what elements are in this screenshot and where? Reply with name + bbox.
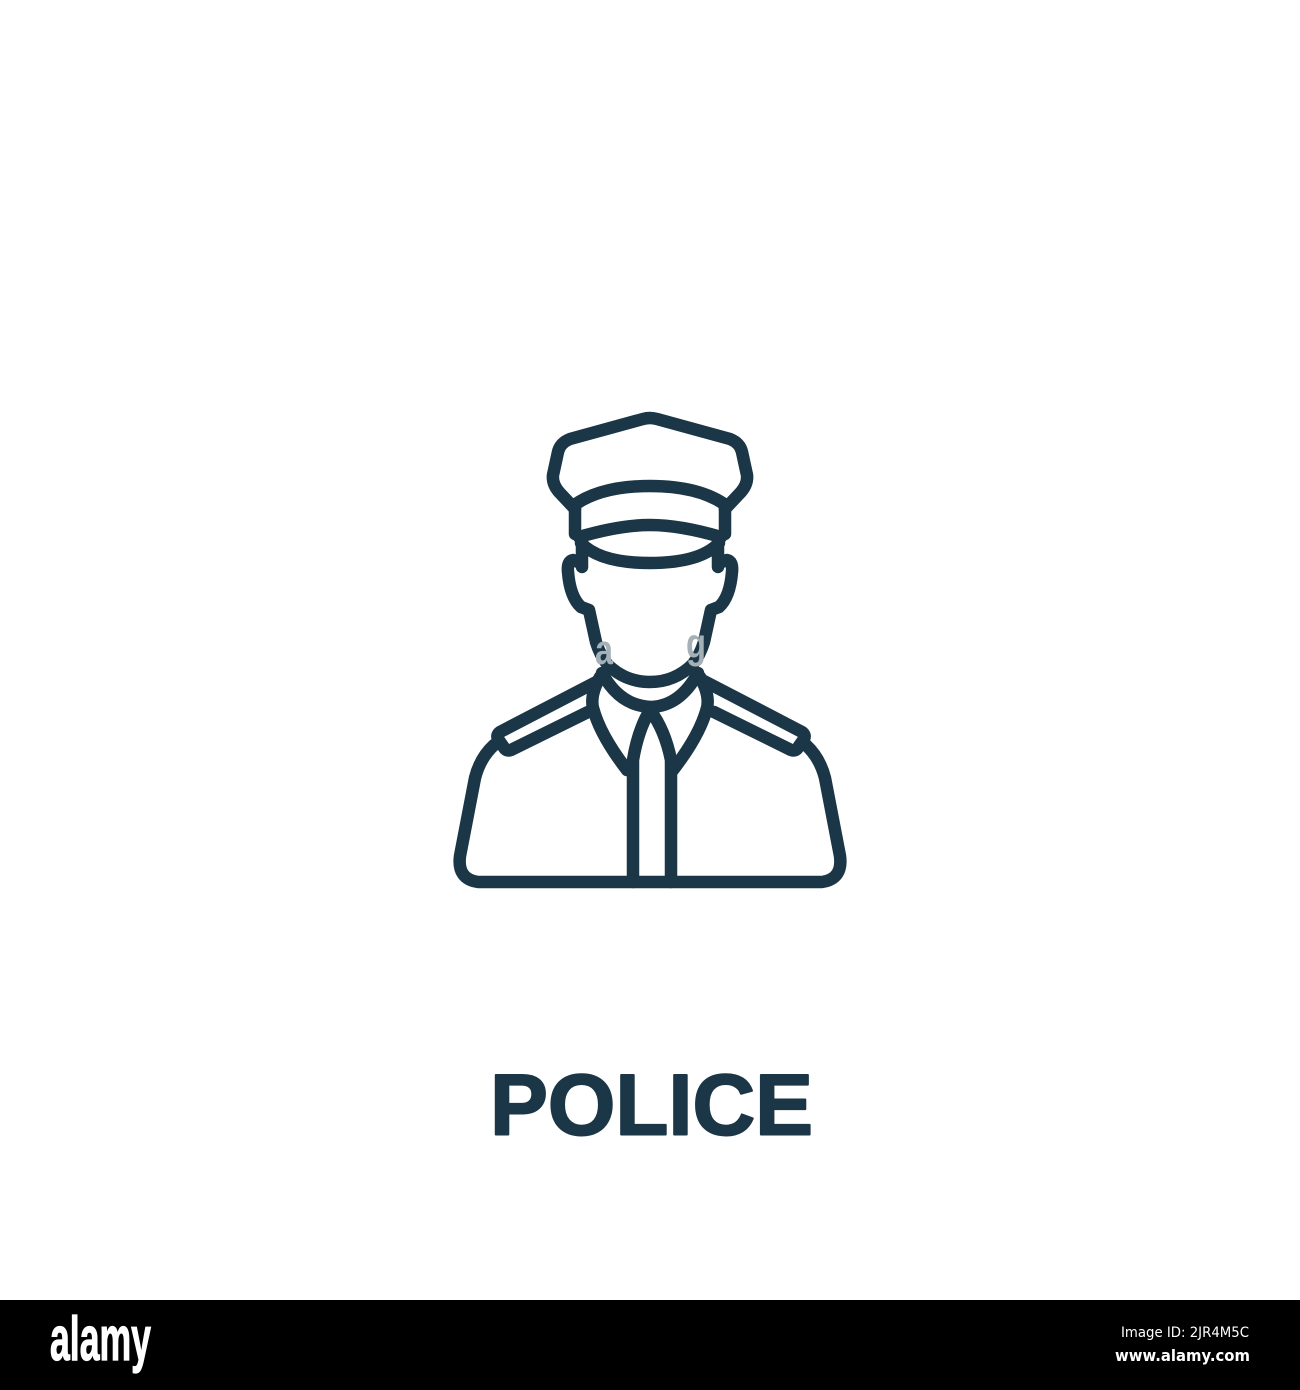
watermark remnants [595,620,706,673]
watermark remnants: g [686,620,706,667]
icon: face outline [568,560,732,682]
icon: cap band [573,486,727,534]
footer bar [0,1300,1300,1390]
icon: collar [592,673,708,770]
image id: Image ID: 2JR4M5C [1121,1325,1249,1341]
logo: alamy: alamy [50,1305,151,1374]
icon: cap crown [553,418,747,509]
watermark remnants: a [595,626,613,673]
title: POLICE: POLICE [490,1058,813,1154]
icon: left epaulette [497,680,600,750]
icon: right epaulette [702,680,805,750]
website: www.alamy.com [1115,1346,1250,1365]
icon: torso [460,745,840,882]
icon: cap visor [579,525,721,567]
icon: police officer [460,418,840,882]
icon: necktie [633,710,671,882]
